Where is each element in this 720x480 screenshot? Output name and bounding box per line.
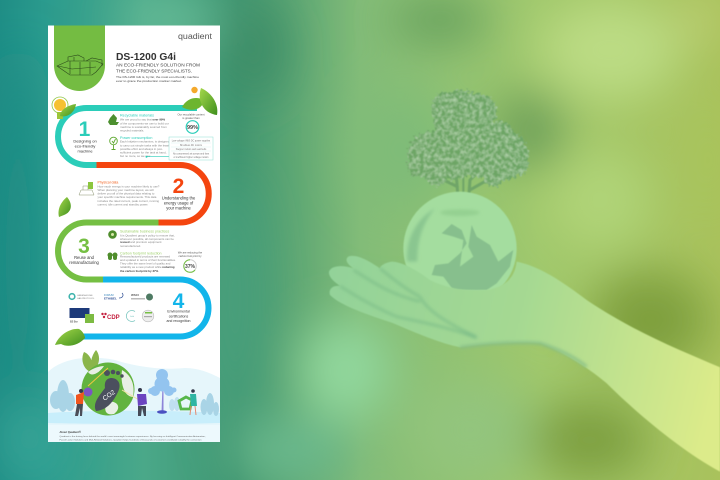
label 1 — [74, 140, 96, 152]
title block: DS-1200 G4i — [116, 51, 176, 63]
label 4: and recognition — [167, 319, 191, 323]
callout: 37 percent: We are reducing the — [178, 250, 203, 254]
icon: carbon footprint — [108, 252, 118, 260]
label 2: energy usage of — [164, 200, 194, 206]
about quadient text — [48, 425, 220, 442]
section 2 — [59, 175, 196, 217]
text: recyclable materials — [120, 114, 169, 133]
number 2: 2 — [173, 175, 184, 198]
label 1: Designing on — [73, 138, 97, 144]
number 4: 4 — [173, 290, 185, 313]
blue tree — [148, 369, 176, 414]
figure: person left with brush — [75, 368, 108, 416]
label 1: eco-friendly — [75, 144, 95, 148]
label 4: certifications — [169, 314, 188, 318]
hand and arm — [329, 256, 720, 472]
text: carbon footprint reduction: They offer the same level of quality and — [120, 262, 171, 266]
callout: 37 percent: 37% — [185, 264, 196, 270]
hill background — [48, 358, 220, 442]
label 4 — [167, 310, 191, 323]
text: power consumption: possible effort and always in just- — [120, 147, 163, 151]
logo: circle c: Gold — [130, 316, 134, 318]
label 2 — [162, 196, 196, 210]
logo: forum ethibel — [104, 293, 123, 300]
text: physical data: Physical data — [98, 180, 118, 184]
icon: light bulb with leaves — [52, 97, 76, 119]
logo: quadient: quadient — [178, 32, 213, 41]
header green blob — [54, 26, 105, 91]
text: carbon footprint reduction: reliability as a new product while reducing — [120, 265, 175, 269]
icon: printer line drawing — [57, 55, 103, 75]
text: power consumption: sufficient power for the task at hand, — [120, 150, 167, 154]
about quadient text: Parcel Locker Solutions and Mail-Related Solutions, Quadient helps hundreds of thousands of customers worldwide simplify the connection — [60, 438, 202, 442]
callout: 99 percent: Our recyclable content — [178, 112, 205, 116]
icon: leaves and sun, top right — [182, 87, 217, 115]
text: physical data: includes the rated current, peak current, running — [98, 199, 159, 203]
callout: 37 percent — [178, 250, 203, 272]
icon: sustainable gear — [108, 230, 117, 239]
label 3: Reuse and — [74, 255, 95, 260]
callout: 37 percent: carbon foot print by — [178, 254, 202, 258]
text: sustainable business practices: wherever possible, all components can be — [120, 237, 174, 241]
text: carbon footprint reduction — [120, 252, 176, 273]
section 3 — [69, 230, 203, 273]
title block: The DS-1200 G4i is, by far, the most eco-friendly machine — [116, 75, 199, 79]
text: carbon footprint reduction: and updated in terms of their functionalities. — [120, 258, 176, 262]
label 1: machine — [77, 148, 93, 154]
text: recyclable materials: We are proud to say that over 99% — [120, 118, 166, 122]
text: carbon footprint reduction: Remanufactured products are renewed — [120, 254, 171, 258]
footprint CO2: CO2 — [102, 389, 117, 402]
logo: cdp: CDP — [107, 315, 120, 321]
label 2: your machine — [166, 206, 192, 210]
callout: 99 percent: is greater than — [182, 116, 200, 120]
icon: recycle symbol — [179, 397, 192, 409]
leaves above globe — [82, 350, 99, 372]
text: carbon footprint reduction: Carbon footprint reduction — [120, 252, 162, 256]
tree — [407, 90, 529, 207]
text: recyclable materials: of the components we use to build our — [120, 121, 169, 125]
text: power consumption: Each Inkjetter mechanism, is designed — [120, 140, 170, 144]
text: power consumption: to carry out simple tasks with the least — [120, 144, 169, 148]
title block — [116, 51, 200, 83]
plant: left — [50, 380, 75, 412]
icon: power bulb — [110, 137, 117, 150]
callout: power list: or inefficient higher voltage motors — [173, 156, 209, 159]
globe — [82, 362, 134, 416]
text: recyclable materials: machine is sustainably sourced from — [120, 125, 167, 129]
logo: forum ethibel: FORUM — [104, 293, 114, 297]
section 4 — [55, 290, 191, 346]
title block: AN ECO-FRIENDLY SOLUTION FROM — [116, 62, 200, 68]
text: physical data: How much energy is your machine likely to use? — [98, 184, 160, 188]
text: recyclable materials: Recyclable materials — [120, 114, 154, 118]
photo: hand holding globe and tree — [329, 90, 720, 472]
text: physical data — [98, 180, 160, 206]
text: power consumption: but no more, so we use: — [120, 154, 151, 158]
callout: power list: Low voltage (48V) DC power supplies — [172, 140, 211, 142]
icon: leaf at path end — [55, 329, 85, 346]
illustration: carbon footprint scene — [48, 350, 220, 442]
text: power consumption — [120, 136, 170, 158]
label 4: Environmental — [167, 310, 190, 314]
callout: 99 percent: 99% — [187, 125, 198, 131]
about quadient text: About Quadient® — [60, 430, 81, 434]
text: power consumption: Power consumption — [120, 136, 152, 140]
logo: wsci: WSCI — [131, 293, 139, 297]
text: physical data: deliver you all of the physical data relating to — [98, 192, 155, 196]
text: carbon footprint reduction: the carbon footprint by 37%. — [120, 269, 159, 273]
figure: person right with brush — [122, 388, 147, 416]
snake path — [58, 108, 209, 336]
logo: forum ethibel: ETHIBEL — [104, 296, 117, 300]
number 3: 3 — [78, 235, 90, 258]
plant: right — [200, 393, 219, 416]
text: sustainable business practices: reused and premium equipment — [120, 240, 162, 244]
logo: greenhouse gas protocol: GAS PROTOCOL — [77, 297, 95, 300]
text: recyclable materials: recycled materials. — [120, 129, 144, 133]
text: physical data: your specific machine requirements. This data — [98, 195, 157, 199]
section 1 — [73, 112, 213, 160]
about quadient text: Quadient is the driving force behind the world's most meaningful customer experiences. By focusing on Intelligent Communication Automation, — [60, 435, 206, 438]
icon: recycle — [108, 114, 119, 125]
callout: power list: Brushless DC motors — [180, 144, 203, 147]
label 2: Understanding the — [162, 196, 196, 200]
icon: printer and plug — [79, 182, 94, 195]
panel: infographic sheet — [48, 26, 220, 442]
number 1: 1 — [79, 118, 91, 141]
logo: sustainability performance: B2 Bsr — [70, 320, 78, 324]
callout: power list — [146, 137, 213, 160]
plant: middle — [169, 397, 180, 411]
icon: leaf — [59, 197, 71, 217]
text: sustainable business practices: Sustainable business practices — [120, 230, 170, 234]
figure: woman at recycle symbol — [190, 389, 197, 415]
logo: greenhouse gas protocol — [69, 294, 95, 300]
text: sustainable business practices: It is Quadient group's policy to ensure that, — [120, 233, 175, 237]
text: physical data: current, idle current and standby power. — [98, 202, 148, 206]
callout: power list: No compressed air pumps and fans — [173, 152, 210, 156]
globe — [403, 192, 517, 305]
logo: ecovadis badge — [142, 310, 154, 322]
callout: power list: Stepper motors and seal belts — [176, 148, 207, 151]
callout: 99 percent — [178, 112, 205, 133]
title block: ever to grace the production marker market. — [116, 79, 182, 83]
text: physical data: When planning your machine layout, we will — [98, 188, 154, 192]
title block: THE ECO-FRIENDLY SPECIALISTS. — [116, 68, 192, 74]
label 3 — [69, 255, 100, 265]
label 3: remanufacturing — [69, 260, 100, 265]
logo: greenhouse gas protocol: GREENHOUSE — [77, 295, 93, 297]
text: sustainable business practices — [120, 230, 175, 248]
text: sustainable business practices: remanufactured. — [120, 244, 141, 248]
